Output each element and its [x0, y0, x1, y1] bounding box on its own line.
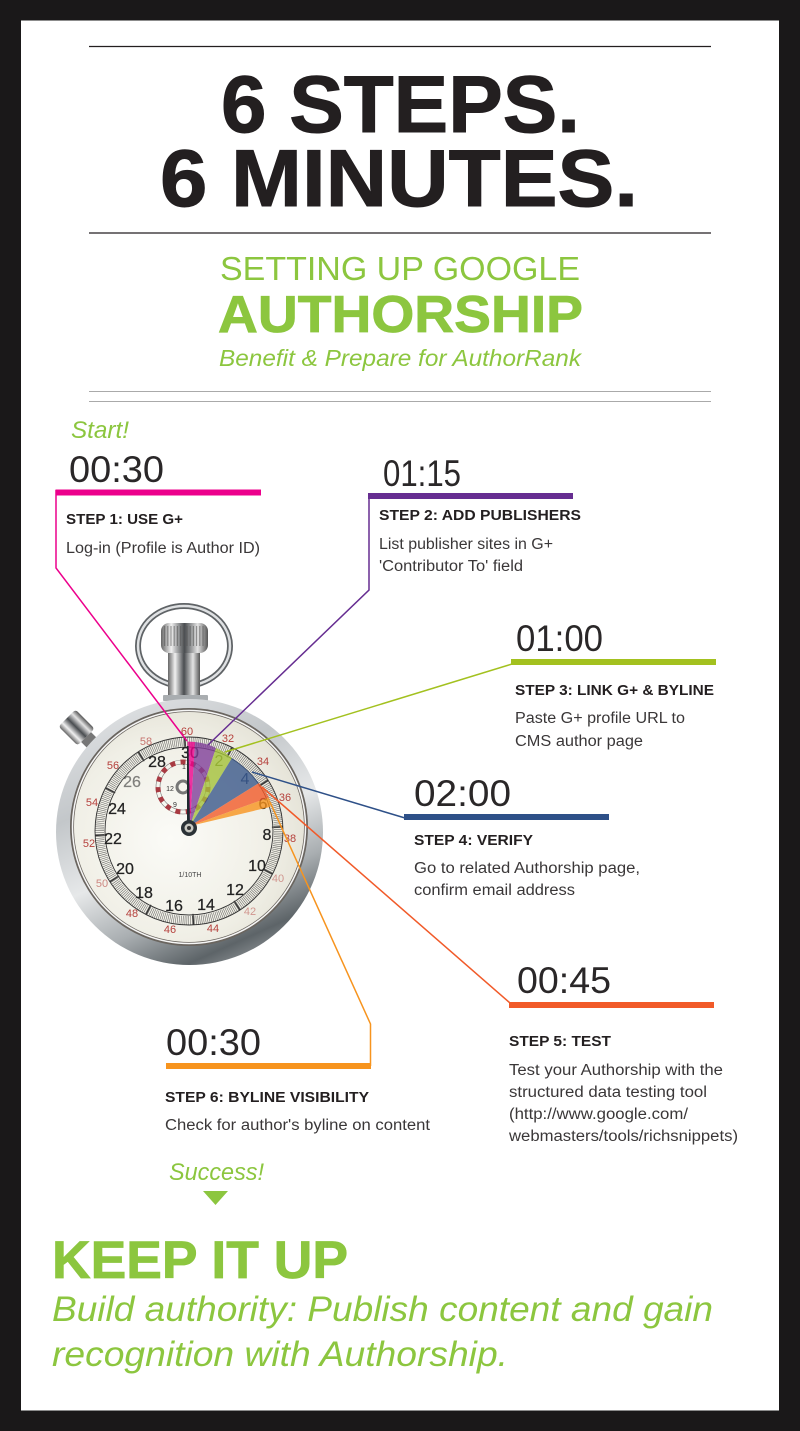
- arrow: down triangle: [203, 1191, 228, 1205]
- seconds numerals: 4: [241, 771, 250, 788]
- case: [56, 699, 323, 965]
- panel: step 5: [262, 787, 738, 1145]
- seconds numerals: 8: [263, 827, 272, 844]
- wedge step 1: [188, 742, 195, 826]
- body 4: Go to related Authorship page,: [414, 860, 640, 877]
- panel: step 4: [252, 772, 640, 899]
- minute numerals: 58: [140, 736, 152, 748]
- heading 5: STEP 5: TEST: [509, 1033, 611, 1050]
- time 5: 00:45: [517, 960, 611, 1001]
- minute numerals: 52: [83, 838, 95, 850]
- minute numerals: 32: [222, 733, 234, 745]
- tick scale: [95, 737, 283, 925]
- closing block: recognition with Authorship.: [52, 1335, 508, 1374]
- bow ring: [138, 606, 230, 686]
- closing block: [52, 1231, 713, 1374]
- side pusher: [58, 709, 100, 751]
- minute numerals: 36: [279, 792, 291, 804]
- stopwatch illustration: [56, 606, 323, 965]
- subtitle line: SETTING UP GOOGLE: [220, 250, 580, 287]
- panel: step 2: [208, 453, 581, 745]
- leader line 6: [270, 802, 370, 1066]
- heading 6: STEP 6: BYLINE VISIBILITY: [165, 1089, 369, 1106]
- minute numerals: 46: [164, 924, 176, 936]
- title line 1: 6 STEPS.: [221, 60, 580, 150]
- leader line 2: [208, 494, 369, 745]
- heading 1: STEP 1: USE G+: [66, 511, 183, 528]
- minute numerals: [83, 726, 296, 936]
- seconds numerals: 16: [165, 898, 183, 915]
- label 1/10TH: 1/10TH: [179, 872, 201, 879]
- body 5: Test your Authorship with the: [509, 1062, 723, 1079]
- minute numerals: 60: [181, 726, 193, 738]
- leader line 1: [56, 490, 187, 741]
- seconds numerals: 14: [197, 897, 215, 914]
- time 2: 01:15: [383, 453, 461, 494]
- sub dial: [156, 760, 210, 814]
- wedge step 5: [190, 783, 269, 826]
- subtitle block: [218, 250, 583, 371]
- title line 2: 6 MINUTES.: [160, 134, 638, 224]
- wedge step 2: [190, 742, 216, 826]
- heading 3: STEP 3: LINK G+ & BYLINE: [515, 682, 714, 699]
- time 3: 01:00: [516, 618, 603, 659]
- panel: step 5: webmasters/tools/richsnippets): [508, 1128, 738, 1145]
- time wedges: [188, 742, 270, 826]
- panel: step 3: [225, 618, 716, 752]
- sub dial: 12: [166, 786, 174, 793]
- panel: step 6: [165, 802, 431, 1134]
- leader line 3: [225, 664, 512, 752]
- body 3: Paste G+ profile URL to: [515, 710, 685, 727]
- panel: step 5: (http://www.google.com/: [509, 1106, 689, 1123]
- time 1: 00:30: [69, 449, 164, 490]
- start label: Start!: [71, 417, 129, 444]
- body 6: Check for author's byline on content: [165, 1117, 431, 1134]
- minute numerals: 42: [244, 906, 256, 918]
- seconds numerals: 26: [123, 774, 141, 791]
- crown knob: [161, 623, 208, 653]
- wedge step 6: [190, 798, 270, 826]
- leader line 5: [262, 787, 510, 1003]
- minute numerals: 48: [126, 908, 138, 920]
- panel: step 2: 'Contributor To' field: [379, 558, 523, 575]
- minute numerals: 50: [96, 878, 108, 890]
- time 6: 00:30: [166, 1022, 261, 1063]
- seconds numerals: 22: [104, 831, 122, 848]
- panel: step 5: structured data testing tool: [509, 1084, 707, 1101]
- sub dial: 1: [182, 764, 186, 771]
- closing text: Build authority: Publish content and gain: [52, 1290, 713, 1329]
- seconds numerals: 10: [248, 858, 266, 875]
- panel: step 4: confirm email address: [414, 882, 575, 899]
- minute numerals: 40: [272, 873, 284, 885]
- seconds numerals: [104, 745, 272, 915]
- tagline: Benefit & Prepare for AuthorRank: [219, 345, 583, 371]
- crown stem: [168, 653, 200, 695]
- bezel: [70, 708, 308, 946]
- body 1: Log-in (Profile is Author ID): [66, 540, 260, 557]
- sub dial: 9: [173, 802, 177, 809]
- minute numerals: 34: [257, 756, 269, 768]
- heading 4: STEP 4: VERIFY: [414, 832, 533, 849]
- dial face: [74, 712, 304, 942]
- subtitle keyword: AUTHORSHIP: [218, 286, 583, 344]
- leader line 4: [252, 772, 405, 818]
- panel: step 1: [56, 417, 261, 741]
- seconds numerals: 24: [108, 801, 126, 818]
- seconds numerals: 2: [215, 753, 224, 770]
- seconds numerals: 12: [226, 882, 244, 899]
- minute numerals: 56: [107, 760, 119, 772]
- collar: [163, 695, 208, 701]
- seconds numerals: 30: [181, 745, 199, 762]
- success label: Success!: [169, 1159, 264, 1186]
- closing heading: KEEP IT UP: [52, 1231, 348, 1290]
- seconds numerals: 20: [116, 861, 134, 878]
- heading 2: STEP 2: ADD PUBLISHERS: [379, 507, 581, 524]
- minute numerals: 54: [86, 797, 98, 809]
- seconds numerals: 28: [148, 754, 166, 771]
- seconds numerals: 6: [259, 796, 268, 813]
- wedge step 4: [190, 758, 259, 826]
- seconds numerals: 18: [135, 885, 153, 902]
- wedge step 3: [190, 748, 232, 826]
- minute numerals: 44: [207, 923, 219, 935]
- title block: [89, 46, 711, 233]
- stopwatch hand: [181, 746, 197, 836]
- minute numerals: 38: [284, 833, 296, 845]
- body 2: List publisher sites in G+: [379, 536, 553, 553]
- time 4: 02:00: [414, 773, 511, 814]
- panel: step 3: CMS author page: [515, 733, 643, 750]
